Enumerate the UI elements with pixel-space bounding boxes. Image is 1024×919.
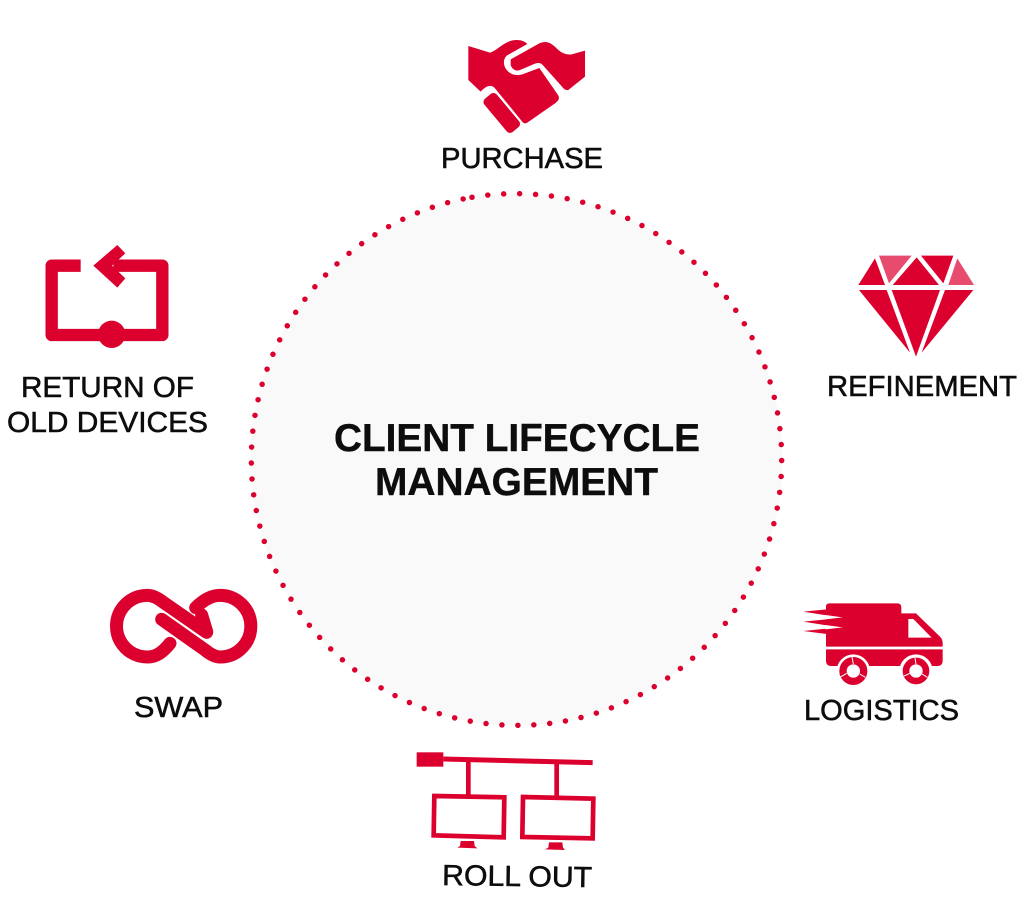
label: purchase: PURCHASE	[441, 143, 603, 175]
label: return of old devices: OLD DEVICES	[7, 407, 208, 439]
label: roll out: ROLL OUT	[442, 860, 593, 894]
central dotted circle	[250, 194, 782, 726]
title: CLIENT LIFECYCLE	[334, 417, 700, 460]
icon: delivery truck	[803, 603, 943, 688]
label: refinement: REFINEMENT	[827, 371, 1017, 403]
label: logistics: LOGISTICS	[804, 695, 959, 727]
title: MANAGEMENT	[375, 461, 658, 504]
icon: handshake	[468, 40, 585, 135]
icon: infinity swap	[116, 595, 251, 657]
icon: network of monitors	[417, 752, 593, 850]
icon: diamond	[858, 256, 974, 357]
icon: return arrow loop	[52, 245, 162, 348]
label: return of old devices	[7, 372, 208, 439]
label: return of old devices: RETURN OF	[21, 372, 194, 404]
title	[334, 417, 700, 504]
label: swap: SWAP	[134, 692, 223, 724]
